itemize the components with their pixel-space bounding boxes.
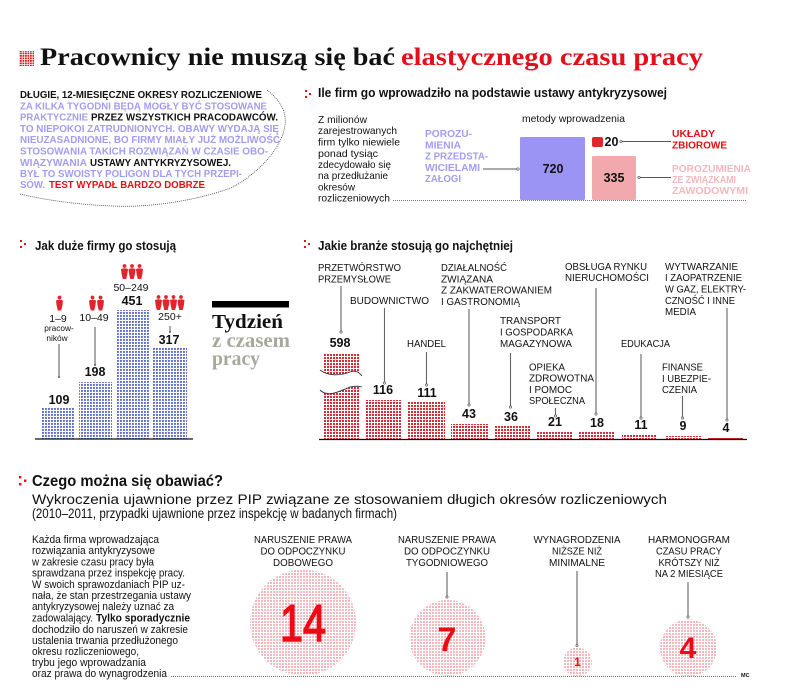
label: staff representatives: Z PRZEDSTA- — [425, 150, 488, 162]
bar chart: industries: 11 — [634, 418, 648, 432]
panel: how many firms introduced it — [305, 85, 751, 204]
labels: industry names: WYTWARZANIE — [665, 261, 738, 273]
labels: industry names: ZWIĄZANA — [441, 274, 493, 286]
bar chart: firm sizes: 451 — [122, 294, 142, 308]
heading: firm sizes: Jak duże firmy go stosują — [35, 238, 177, 253]
text block: description: zdecydowało się — [318, 159, 391, 171]
labels: industry names: ZDROWOTNA — [529, 372, 594, 384]
labels: industry names: CZENIA — [662, 384, 697, 396]
labels: industry names: MEDIA — [665, 306, 696, 318]
panel: intro text: NIEUZASADNIONE, BO FIRMY MIAŁY JUŻ MOŻLIWOŚĆ — [20, 133, 280, 146]
text block: description: okresów — [318, 182, 355, 194]
bar chart: industries: 598 — [330, 336, 350, 350]
label: staff representatives: POROZU- — [425, 128, 472, 140]
label: trade unions — [672, 163, 751, 197]
square: 20 — [592, 135, 618, 149]
labels: industry names: HANDEL — [407, 338, 446, 350]
labels: industry names: BUDOWNICTWO — [350, 295, 429, 307]
label: collective agreements — [672, 128, 727, 152]
label: staff representatives: ZAŁOGI — [425, 173, 461, 185]
callout: week with working time: z czasem — [212, 331, 290, 352]
label: trade unions: POROZUMIENIA — [672, 163, 751, 175]
bar chart: industries: 4 — [723, 421, 730, 435]
bar chart: firm sizes: ników — [46, 333, 69, 343]
circle: schedule under 2 months: HARMONOGRAM — [648, 534, 730, 546]
text block: inspection findings: oraz prawa do wynagrodzenia — [32, 668, 167, 680]
circle: daily rest: DOBOWEGO — [273, 557, 333, 569]
text block: description — [318, 114, 400, 204]
circle: pay below minimum: 1 — [574, 655, 581, 669]
label: staff representatives — [425, 128, 488, 185]
panel: intro text: SÓW. — [20, 178, 45, 191]
labels: industry names: PRZEMYSŁOWE — [318, 274, 391, 286]
credit: MC — [741, 673, 750, 679]
icon: title grid square — [19, 51, 34, 66]
circle: weekly rest — [398, 534, 496, 676]
labels: industry names: I UBEZPIE- — [662, 373, 711, 385]
text block: inspection findings: rozwiązania antykryzysowe — [32, 545, 155, 557]
labels: industry names: EDUKACJA — [621, 338, 670, 350]
labels: industry names: OPIEKA — [529, 362, 565, 374]
labels: industry names: I GASTRONOMIĄ — [441, 296, 521, 308]
callout: week with working time: Tydzień — [212, 312, 283, 333]
square: 335: 335 — [604, 171, 624, 185]
bar chart: industries: 21 — [548, 415, 562, 429]
icon: section marker — [304, 240, 310, 248]
circle: schedule under 2 months: CZASU PRACY — [656, 546, 722, 558]
panel: intro text: BYŁ TO SWOISTY POLIGON DLA TYCH PRZEPI- — [20, 168, 242, 180]
labels: industry names: Z ZAKWATEROWANIEM — [441, 284, 552, 296]
circle: daily rest: DO ODPOCZYNKU — [260, 546, 346, 558]
bar chart: firm sizes: 198 — [85, 365, 105, 379]
bar chart: industries: 43 — [462, 407, 476, 421]
label: trade unions: ZE ZWIĄZKAMI — [672, 174, 736, 186]
text block: description: na przedłużanie — [318, 170, 388, 182]
labels: industry names: NIERUCHOMOŚCI — [565, 271, 649, 284]
circle: weekly rest: TYGODNIOWEGO — [406, 557, 488, 569]
labels: industry names: CZNOŚĆ I INNE — [665, 294, 735, 307]
panel: firm sizes — [20, 238, 193, 439]
text block: inspection findings: nała, że stan przestrzegania ustawy — [32, 590, 192, 602]
callout: week with working time — [212, 301, 290, 370]
labels: industry names: DZIAŁALNOŚĆ — [441, 261, 507, 274]
labels: industry names: I GOSPODARKA — [500, 326, 573, 338]
title — [19, 44, 704, 71]
panel: intro text — [20, 89, 285, 206]
circle: daily rest: NARUSZENIE PRAWA — [254, 534, 352, 546]
wave: axis break — [320, 370, 362, 394]
labels: industry names: MAGAZYNOWA — [500, 338, 572, 350]
text block: description: rozliczeniowych — [318, 192, 390, 204]
text block: inspection findings: Tylko sporadycznie — [96, 612, 190, 624]
panel: intro text: DŁUGIE, 12-MIESIĘCZNE OKRESY ROZLICZENIOWE — [20, 89, 262, 101]
text block: inspection findings: okresu rozliczeniowego, — [32, 646, 139, 658]
bar chart: industries: 9 — [680, 419, 687, 433]
subtitle: (2010–2011, przypadki ujawnione przez inspekcję w badanych firmach) — [32, 506, 397, 521]
icon: section marker — [305, 90, 311, 98]
labels: industry names: PRZETWÓRSTWO — [318, 261, 401, 274]
circle: pay below minimum: MINIMALNE — [549, 557, 605, 569]
bar chart: firm sizes: 109 — [49, 393, 69, 407]
labels: industry names: I ZAOPATRZENIE — [665, 272, 742, 284]
labels: industry names: FINANSE — [662, 362, 703, 374]
label: staff representatives: MIENIA — [425, 140, 461, 152]
panel: intro text: TO NIEPOKOI ZATRUDNIONYCH. OBAWY WYDAJĄ SIĘ — [20, 123, 279, 135]
text block: inspection findings: Każda firma wprowadzająca — [32, 534, 159, 546]
circle: schedule under 2 months: KRÓTSZY NIŻ — [658, 556, 720, 569]
text block: description: Z milionów — [318, 114, 367, 126]
label: collective agreements: ZBIOROWE — [672, 140, 727, 152]
panel: intro text: USTAWY ANTYKRYZYSOWEJ. — [90, 157, 231, 169]
panel: intro text: WIĄZYWANIA — [20, 157, 87, 169]
text block: inspection findings: trybu jego wprowadzania — [32, 657, 146, 669]
circle: weekly rest: 7 — [438, 621, 456, 659]
circle: pay below minimum: WYNAGRODZENIA — [534, 534, 620, 546]
circle: schedule under 2 months: NA 2 MIESIĄCE — [655, 568, 723, 580]
icon: people — [56, 264, 184, 310]
circle: weekly rest: DO ODPOCZYNKU — [404, 546, 490, 558]
labels: industry names — [318, 261, 746, 407]
circle: schedule under 2 months: 4 — [680, 632, 697, 665]
text block: inspection findings: antykryzysowej należy uznać za — [32, 601, 174, 613]
label: trade unions: ZAWODOWYMI — [672, 185, 748, 197]
heading: industries: Jakie branże stosują go najchętniej — [318, 238, 513, 253]
circle: pay below minimum: NIŻSZE NIŻ — [552, 544, 603, 558]
label: staff representatives: WICIELAMI — [425, 162, 480, 174]
square: 20: 20 — [605, 135, 618, 149]
heading: how many firms: Ile firm go wprowadziło na podstawie ustawy antykryzysowej — [318, 85, 667, 100]
labels: industry names: I POMOC — [529, 384, 572, 396]
icon: section marker — [19, 476, 26, 485]
title: Pracownicy nie muszą się bać — [40, 44, 395, 71]
title: elastycznego czasu pracy — [401, 44, 704, 71]
bar chart: firm sizes: 317 — [159, 333, 179, 347]
bar chart: firm sizes: 50–249 — [113, 282, 149, 294]
square: 720 — [520, 137, 585, 200]
caption: methods: metody wprowadzenia — [522, 113, 625, 125]
panel: intro text: STOSOWANIA TAKICH ROZWIĄZAŃ W CZASIE OBO- — [20, 144, 268, 158]
subtitle: Wykroczenia ujawnione przez PIP związane ze stosowaniem długich okresów rozliczeniowych — [32, 492, 667, 507]
bar chart: firm sizes: 250+ — [158, 311, 182, 323]
square: 720: 720 — [543, 162, 563, 176]
text block: inspection findings: dochodziło do naruszeń w zakresie — [32, 624, 188, 636]
callout: week with working time: pracy — [212, 349, 260, 370]
text block: description: firm tylko niewiele — [318, 136, 400, 148]
text block: description: zarejestrowanych — [318, 125, 397, 137]
panel: intro text: PRAKTYCZNIE — [20, 112, 88, 124]
heading: what to fear: Czego można się obawiać? — [32, 473, 223, 490]
labels: industry names: TRANSPORT — [500, 315, 562, 327]
bar chart: industries — [319, 286, 747, 440]
panel: intro text: PRZEZ WSZYSTKICH PRACODAWCÓW. — [91, 111, 278, 124]
bar chart: firm sizes — [35, 282, 193, 439]
square: 335 — [592, 156, 636, 200]
text block: inspection findings: w zakresie czasu pracy była — [31, 556, 154, 568]
panel: intro text: ZA KILKA TYGODNI BĘDĄ MOGŁY BYĆ STOSOWANE — [20, 99, 267, 112]
circle: weekly rest: NARUSZENIE PRAWA — [398, 534, 496, 546]
panel: industries — [304, 238, 747, 440]
bar chart: firm sizes: pracow- — [44, 323, 74, 333]
text block: inspection findings: W swoich sprawozdaniach PIP uz- — [32, 579, 185, 591]
bar chart: industries: 18 — [590, 416, 604, 430]
label: collective agreements: UKŁADY — [672, 128, 715, 140]
bar chart: firm sizes: 1–9 — [49, 313, 67, 325]
labels: industry names: OBSŁUGA RYNKU — [565, 261, 647, 273]
circle: daily rest: 14 — [280, 595, 326, 653]
text block: inspection findings — [31, 534, 192, 680]
panel: what to fear — [19, 473, 750, 680]
bar chart: industries: 36 — [504, 410, 518, 424]
bar chart: firm sizes: 10–49 — [79, 312, 109, 324]
text block: inspection findings: ustalenia trwania przedłużonego — [32, 635, 178, 647]
bar chart: industries: 111 — [417, 386, 437, 400]
text block: description: ponad tysiąc — [318, 148, 378, 160]
circle: daily rest — [250, 534, 356, 676]
bar chart: industries: 116 — [373, 383, 393, 397]
panel: intro text: TEST WYPADŁ BARDZO DOBRZE — [49, 179, 205, 191]
text block: inspection findings: zadowalający. — [32, 612, 93, 624]
subtitle — [32, 492, 667, 521]
labels: industry names: SPOŁECZNA — [529, 395, 585, 407]
icon: section marker — [20, 240, 26, 248]
circle: schedule under 2 months — [648, 534, 730, 676]
text block: inspection findings: sprawdzana przez inspekcję pracy. — [32, 568, 185, 580]
labels: industry names: W GAZ, ELEKTRY- — [665, 284, 746, 296]
circle: pay below minimum — [534, 534, 620, 676]
